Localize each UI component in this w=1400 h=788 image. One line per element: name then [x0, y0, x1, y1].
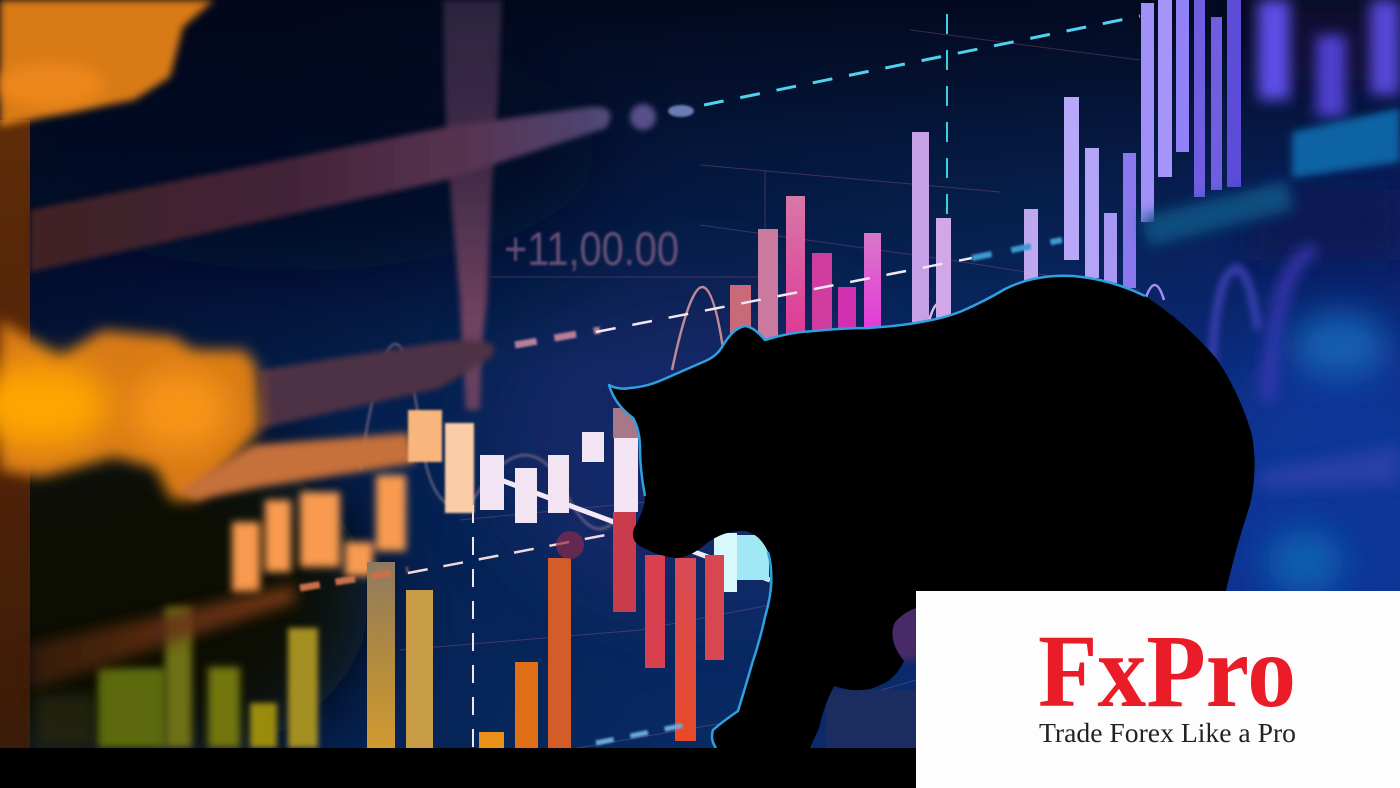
second dashed trend line — [261, 195, 1290, 428]
panel: logo — [916, 591, 1400, 788]
purple glow under bear belly — [826, 600, 920, 748]
blurred teal and blue blobs, right — [1260, 108, 1400, 594]
cyan dashed trend line, upper — [704, 16, 1140, 105]
dashed vertical cyan line — [946, 14, 948, 225]
logo tagline: Trade Forex Like a Pro — [1039, 717, 1296, 748]
blurred vertical dashed purple line — [443, 0, 502, 410]
bear silhouette with blue outline — [609, 276, 1255, 748]
blurred top-left orange glow — [0, 0, 214, 127]
blurred purple trend line, upper — [30, 104, 694, 272]
left vertical brown band — [0, 120, 30, 748]
dashed vertical white line — [472, 505, 474, 748]
blurred purple bars, top right — [1258, 0, 1400, 117]
thin sine curves — [360, 250, 1315, 529]
lower orange and gold bars — [367, 558, 571, 748]
blurred candles near centre — [408, 410, 474, 513]
muted bar behind bear head — [613, 408, 638, 438]
blurred value label: +11,00.00 — [504, 222, 679, 275]
white candlesticks — [480, 432, 638, 523]
blurred olive and yellow bars — [36, 607, 318, 748]
pink and purple bar chart — [730, 0, 1241, 355]
blurred orange candles — [232, 475, 406, 592]
third dashed trend line — [30, 531, 690, 743]
bottom black bar — [0, 748, 916, 788]
red bars — [613, 512, 724, 741]
grid lines — [400, 30, 1140, 775]
candlestick wick — [490, 476, 770, 580]
logo wordmark: FxPro — [1038, 614, 1296, 729]
cyan candlestick — [714, 533, 769, 592]
blurred orange price band, left — [0, 320, 416, 500]
